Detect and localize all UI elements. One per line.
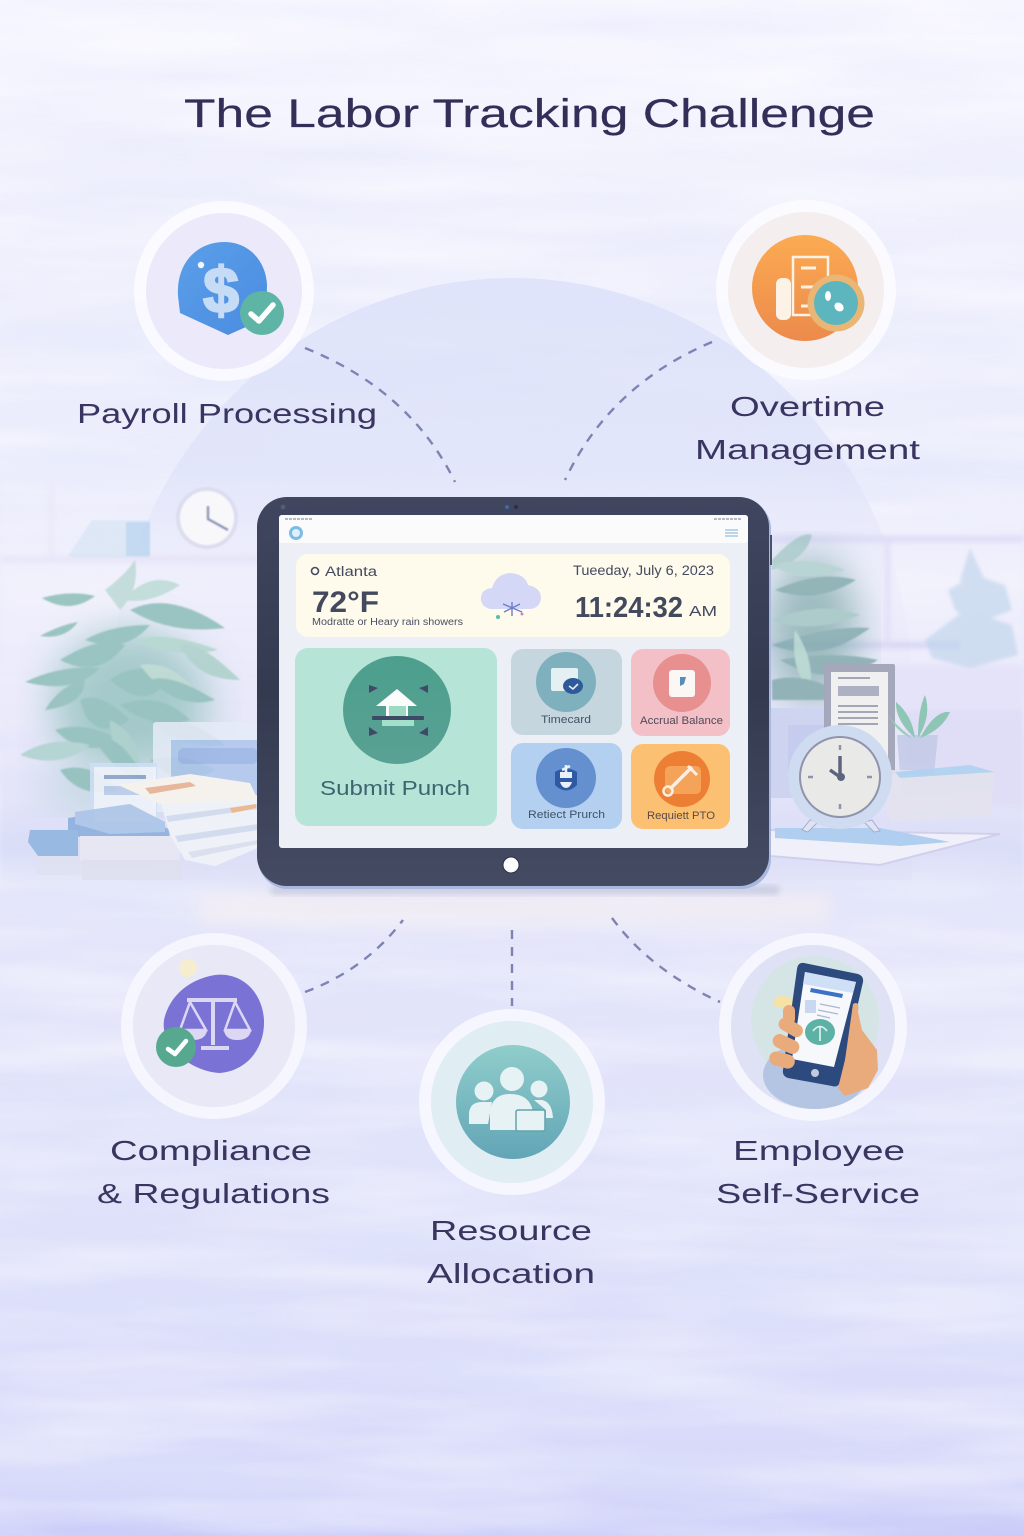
submit punch tile bbox=[295, 648, 497, 826]
node: overtime management bbox=[695, 206, 920, 465]
label: Employee bbox=[733, 1135, 905, 1166]
tablet body bbox=[257, 497, 772, 889]
background dome bbox=[112, 278, 912, 880]
weather card: 11:24:32 bbox=[575, 592, 683, 624]
weather card: AM bbox=[689, 603, 717, 620]
table paper blue stripe bbox=[775, 828, 950, 846]
tablet bbox=[257, 497, 780, 895]
tablet screen bbox=[279, 515, 748, 848]
left plant bbox=[20, 560, 240, 815]
accrual balance tile bbox=[631, 649, 730, 736]
floor glow bbox=[200, 886, 830, 925]
request pto tile: Requiett PTO bbox=[647, 810, 715, 822]
node: payroll processing bbox=[77, 207, 377, 429]
room wall and window frames bbox=[0, 470, 1024, 900]
right small plant bbox=[888, 695, 950, 775]
label: Self-Service bbox=[716, 1178, 920, 1209]
location pin bbox=[312, 568, 318, 574]
table paper bbox=[770, 830, 1000, 865]
label: Resource bbox=[430, 1215, 592, 1246]
label: Management bbox=[695, 434, 920, 465]
icon: scales bbox=[127, 939, 301, 1113]
reject punch tile: Retiect Prurch bbox=[528, 809, 605, 821]
icon: payroll: $ bbox=[203, 254, 239, 326]
right plant bbox=[766, 534, 878, 705]
node: resource allocation bbox=[425, 1015, 599, 1289]
label bbox=[427, 1215, 595, 1289]
punch icon bbox=[369, 685, 428, 736]
left book stack bbox=[28, 804, 182, 880]
right pot bbox=[770, 708, 828, 798]
right book stack bbox=[885, 765, 995, 822]
left monitor bbox=[153, 722, 259, 812]
weather card: Modratte or Heary rain showers bbox=[312, 617, 463, 628]
accrual balance tile: Accrual Balance bbox=[640, 715, 723, 727]
timecard tile bbox=[511, 649, 622, 735]
tablet shadow bbox=[270, 885, 780, 895]
home button bbox=[503, 857, 519, 873]
submit punch tile: Submit Punch bbox=[320, 778, 470, 800]
timecard tile: Timecard bbox=[541, 714, 591, 726]
left paper stack bbox=[118, 774, 258, 866]
label bbox=[97, 1135, 330, 1209]
weather card bbox=[296, 554, 730, 637]
weather icon: cloud bbox=[481, 573, 541, 619]
right alarm clock bbox=[788, 725, 892, 832]
icon: payroll bbox=[140, 207, 308, 375]
weather card: Atlanta bbox=[325, 564, 378, 579]
label bbox=[695, 391, 920, 465]
far right plant bbox=[925, 548, 1018, 668]
phone bbox=[783, 963, 863, 1086]
background office scene bbox=[0, 470, 1024, 925]
wall clock bbox=[176, 487, 238, 549]
label: Allocation bbox=[427, 1258, 595, 1289]
icon: team bbox=[425, 1015, 599, 1189]
label: Overtime bbox=[730, 391, 885, 422]
hand bbox=[768, 1003, 878, 1096]
request pto tile bbox=[631, 744, 730, 829]
label: Payroll Processing bbox=[77, 398, 377, 429]
weather card: Tueeday, July 6, 2023 bbox=[573, 563, 714, 578]
title: The Labor Tracking Challenge bbox=[184, 92, 875, 136]
reject punch tile bbox=[511, 743, 622, 829]
label: & Regulations bbox=[97, 1178, 330, 1209]
left document bbox=[90, 763, 157, 825]
dashed connectors bbox=[305, 342, 720, 1006]
node: compliance and regulations bbox=[97, 939, 330, 1209]
right frame document bbox=[824, 664, 895, 774]
icon: phone in hand bbox=[725, 939, 901, 1115]
label: Compliance bbox=[110, 1135, 312, 1166]
node: employee self-service bbox=[716, 939, 920, 1209]
icon: overtime bbox=[722, 206, 890, 374]
weather card: 72°F bbox=[312, 586, 379, 619]
label bbox=[716, 1135, 920, 1209]
app header bbox=[279, 515, 748, 543]
wall picture bbox=[68, 520, 150, 558]
